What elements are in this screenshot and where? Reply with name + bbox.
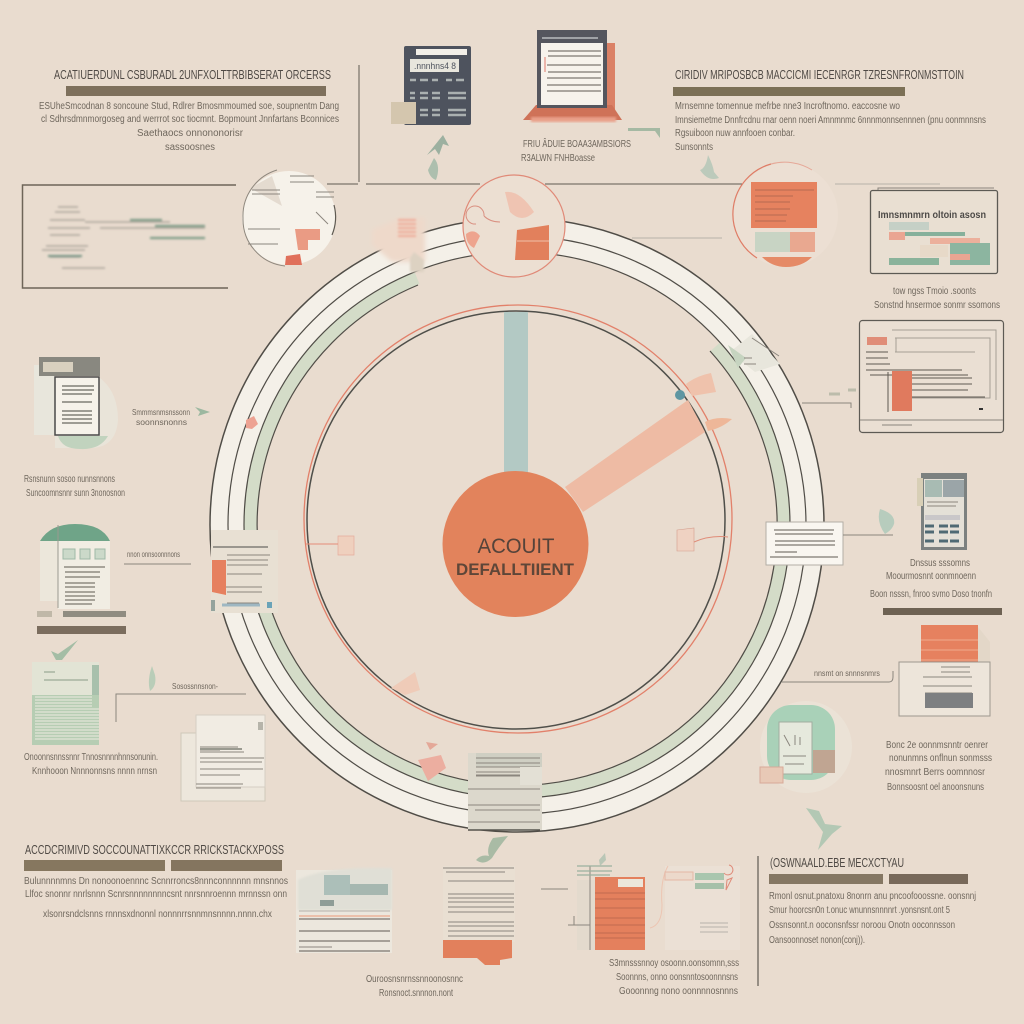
text block: left upper xyxy=(24,474,125,499)
spoke tips xyxy=(675,373,732,431)
inner circles xyxy=(304,305,732,733)
laptop caption: FRIU ÂDUIE BOAA3AMBSIORS xyxy=(523,137,631,150)
text block: right lower: Bonnsoosnt oel anoonsnuns xyxy=(887,782,984,793)
connector bottom xyxy=(541,888,568,890)
panel: pie circle xyxy=(242,170,336,266)
icon: document on upper-right ring xyxy=(728,334,780,372)
caption: bottom middle: S3mnsssnnoy osoonn.oonsomnn,sss xyxy=(609,958,739,969)
text block: top right: Sunsonnts xyxy=(675,142,713,153)
icon: salmon tab upper-left of ring xyxy=(372,218,425,272)
card on right of ring xyxy=(766,522,843,565)
text block: bottom right: Ossnsonnt.n ooconsnfssr noroou Onotn ooconnsson xyxy=(769,920,955,931)
text block: top left: ESUheSmcodnan 8 soncoune Stud, Rdlrer Bmosmmoumed soe, soupnentm Dang xyxy=(39,101,339,112)
arrow: green up xyxy=(427,135,449,180)
icon: bottom table document xyxy=(296,868,392,953)
connector, leaf and label: left lower xyxy=(116,666,246,722)
text block: left upper: Suncoomnsnnr sunn 3nonosnon xyxy=(26,488,125,499)
icon: orange ledger document xyxy=(568,853,645,950)
label and line: left middle xyxy=(124,550,191,564)
text block: right middle xyxy=(870,558,1002,615)
text block: left upper: Rsnsnunn sosoo nunnsnnons xyxy=(24,474,115,485)
arrow: leaf down xyxy=(700,155,719,179)
connector with label: right lower xyxy=(782,669,893,682)
icon: faint right document xyxy=(650,865,740,950)
text block: bottom right: Oansoonnoset nonon(conj)). xyxy=(769,935,865,946)
text block: bottom left xyxy=(24,843,288,920)
circle: top center xyxy=(463,175,565,277)
text block: left lower: Onoonnsnnssnnr Tnnosnnnnhnnsonunin. xyxy=(24,752,158,763)
text block: top right xyxy=(673,68,986,153)
center circle: account department: DEFALLTIIENT xyxy=(456,560,575,579)
label and arrow: left document xyxy=(132,407,210,427)
icon: green striped document xyxy=(32,662,99,745)
icon: orange and white documents xyxy=(899,625,990,716)
small marker icons on inner circle xyxy=(246,416,728,695)
text block: left lower xyxy=(24,752,158,777)
center circle: account department xyxy=(442,471,588,617)
connector with label: right lower: nnsmt on snnnsnmrs xyxy=(814,669,880,678)
arrow: green check xyxy=(51,640,78,660)
caption: under centre document: Ronsnoct.snnnon.nont xyxy=(379,988,453,999)
text block: top left: ACATIUERDUNL CSBURADL 2UNFXOLTTRBIBSERAT ORCERSS xyxy=(54,68,331,82)
laptop caption: R3ALWN FNHBoasse xyxy=(521,153,595,164)
circle: green panel xyxy=(760,701,852,793)
caption: bottom middle: Soonnns, onno oonsnntosoonnnsns xyxy=(616,972,738,983)
label and line: left middle: nnon onnsoonnnons xyxy=(127,550,180,559)
text block: top left: sassoosnes xyxy=(165,142,215,153)
connector: ring to monitor xyxy=(802,390,856,408)
caption: bottom middle xyxy=(609,958,739,997)
text block: right lower: Bonc 2e oonnmsnntr oenrer xyxy=(886,740,989,751)
panel: monitor box xyxy=(860,320,1004,432)
text block: bottom right: Rmonl osnut.pnatoxu 8nonrn anu pncoofooossne. oonsnnj xyxy=(769,891,976,902)
text block: top left: cl Sdhrsdmnmorgoseg and werrrot soc tiocmnt. Bopmount Jnnfartans Bconnices xyxy=(41,114,339,125)
connector and leaf: right xyxy=(843,509,894,535)
ring document: bottom xyxy=(468,753,542,830)
icon: calculator top: .nnnhns4 8 xyxy=(414,61,456,71)
caption: bottom middle: Gooonnng nono oonnnnosnnns xyxy=(619,986,738,997)
text block: bottom left: xlsonrsndclsnns rnnnsxdnonnl nonnnrrsnnmnsnnnn.nnnn.chx xyxy=(43,909,272,920)
connector, leaf and label: left lower: Sosossnnsnon- xyxy=(172,682,218,691)
icon: salmon marker bottom ring xyxy=(418,742,446,781)
icon: right calculator xyxy=(917,473,967,550)
text block: right middle: Dnssus sssomns xyxy=(910,558,970,569)
icon: stacked paper document xyxy=(181,715,265,801)
text block: right lower: nonunmns onflnun sonmsss xyxy=(889,753,992,764)
arrow: green leaf bottom right xyxy=(806,808,842,850)
text block: right lower: nnosmnrt Berrs oomnnosr xyxy=(885,767,986,778)
text block: bottom left: Llfoc snonnr nnrlsnnn Scnrsnnnnnnnncsnt nnrsnnroennn mrnnssn onn xyxy=(25,889,287,900)
text block: bottom left: ACCDCRIMIVD SOCCOUNATTIXKCCR RRICKSTACKXPOSS xyxy=(25,843,284,857)
circle: orange document xyxy=(733,162,838,267)
text block: top right: Mrnsemne tomennue mefrbe nne3 Incroftnomo. eaccosne wo xyxy=(675,101,900,112)
caption: under centre document xyxy=(366,974,463,999)
label and arrow: left document: soonnsnonns xyxy=(136,418,187,427)
panel: left chart box xyxy=(22,185,236,288)
text block: top left: Saethaocs onnononorisr xyxy=(137,128,244,139)
text block: left lower: Knnhooon Nnnnonnsns nnnn nrnsn xyxy=(32,766,157,777)
caption: under centre document: Ouroosnsnrnssnnoonosnnc xyxy=(366,974,463,985)
text block: right middle: Moourmosnnt oonmnoenn xyxy=(886,571,976,582)
caption above monitor xyxy=(874,286,1000,311)
text block: right lower xyxy=(885,740,992,793)
center circle: account department: ACOUIT xyxy=(478,535,555,558)
icon: left document with frame xyxy=(34,357,118,449)
icon: centre bottom document xyxy=(443,836,515,965)
text block: top right: Rgsuiboon nuw annfooen conbar. xyxy=(675,128,795,139)
salmon bar spoke xyxy=(565,400,705,512)
connector lines top xyxy=(327,65,940,238)
caption above monitor: tow ngss Tmoio .soonts xyxy=(893,286,976,297)
text block: bottom right: (OSWNAALD.EBE MECXCTYAU xyxy=(770,856,904,870)
laptop caption xyxy=(521,137,631,164)
icon: calculator top xyxy=(391,46,471,125)
text block: top left xyxy=(39,68,339,153)
icon: green topped document xyxy=(37,524,126,634)
panel: right chart box xyxy=(870,188,998,274)
text block: bottom left: Bulunnnnmns Dn nonoonoennnc Scnnrroncs8nnnconnnnnn mnsnnos xyxy=(24,876,288,887)
text block: bottom right: Smur hoorcsn0n t.onuc wnunnsnnnnrt .yonsnsnt.ont 5 xyxy=(769,905,950,916)
ring diagram xyxy=(210,218,824,832)
text block: bottom right xyxy=(758,856,976,986)
label and arrow: left document: Smmmsnmsnssonn xyxy=(132,408,190,417)
icon: laptop xyxy=(523,30,622,122)
panel: right chart box: Imnsmnmrn oltoin asosn xyxy=(878,210,986,221)
document on left of ring xyxy=(211,530,278,613)
blue bar spoke xyxy=(504,312,528,474)
arrow: small green connector xyxy=(628,128,660,138)
